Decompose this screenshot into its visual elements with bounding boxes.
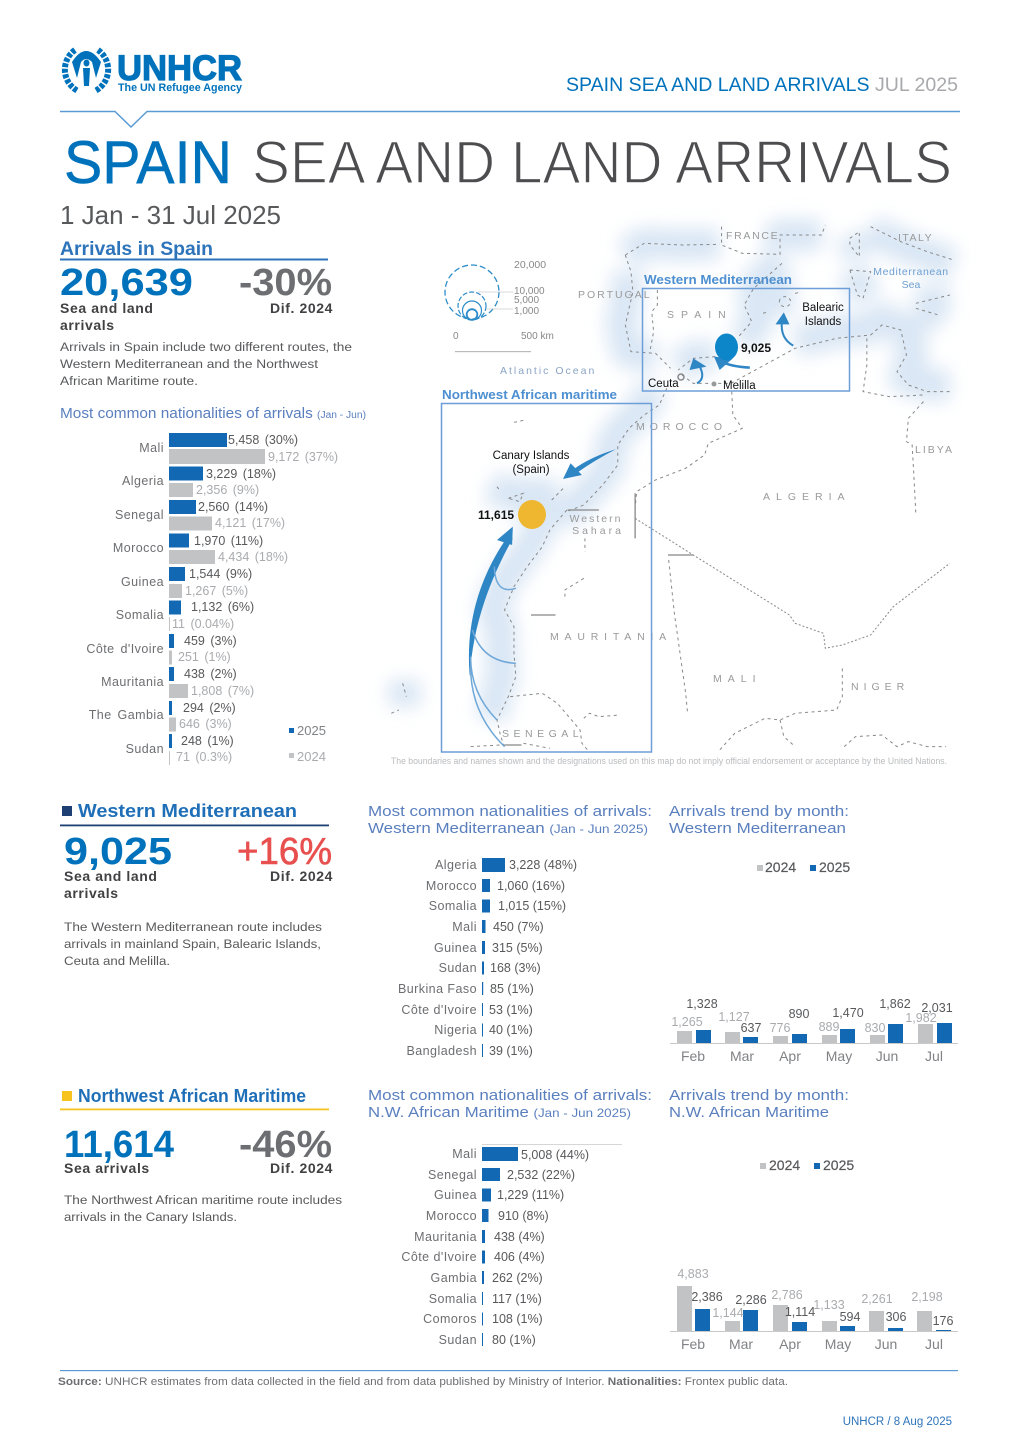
marker: Northwest African 11,615	[478, 500, 546, 529]
heading: nationalities Western Mediterranean	[368, 803, 652, 837]
legend: 2024	[297, 749, 326, 764]
country borders and coastlines	[391, 225, 954, 750]
heading: nationalities Western Mediterranean: Most common nationalities of arrivals:	[368, 803, 652, 820]
map country labels: SENEGAL	[502, 728, 583, 740]
route box: Northwest African maritime	[442, 388, 652, 752]
bar chart: nationalities 2025 vs 2024: 1,132 (6%)	[191, 600, 254, 614]
bar chart: nationalities 2025 vs 2024: 5,458 (30%)	[228, 433, 298, 447]
column chart: Western Mediterranean monthly: 830	[865, 1021, 885, 1035]
column chart: Western Mediterranean monthly: Mar	[730, 1048, 754, 1064]
bar chart: nationalities 2025 vs 2024: Senegal	[115, 508, 164, 522]
bar chart: nationalities 2025 vs 2024: Mauritania	[101, 675, 164, 689]
bar chart: Western Mediterranean nationalities: Guinea	[434, 941, 477, 955]
map country labels: SPAIN	[667, 309, 733, 321]
route box: Western Mediterranean	[642, 273, 850, 391]
column chart: Northwest African monthly: 1,144	[712, 1306, 744, 1320]
description	[60, 340, 352, 388]
map country labels	[500, 230, 954, 740]
logo: UNHCR: The UN Refugee Agency	[118, 82, 243, 94]
bar chart: nationalities 2025 vs 2024	[86, 433, 338, 765]
panel: Western Mediterranean: arrivals	[64, 885, 119, 901]
title: SEA AND LAND ARRIVALS	[252, 129, 952, 196]
map legend: circle sizes and scale: 1,000	[514, 306, 539, 317]
description: Western Mediterranean and the Northwest	[60, 357, 319, 371]
total arrivals: 11,614	[64, 1124, 174, 1166]
map country labels: Atlantic Ocean	[500, 365, 596, 377]
bar chart: Western Mediterranean nationalities: Nigeria	[434, 1023, 477, 1037]
heading: trend Western Mediterranean	[669, 803, 849, 837]
bar chart: Northwest African nationalities: Guinea	[434, 1188, 477, 1202]
column chart: Northwest African monthly: 2,198	[911, 1290, 943, 1304]
map legend: circle sizes and scale: 500 km	[521, 331, 554, 342]
map country labels: MALI	[713, 673, 762, 685]
place labels: Melilla	[723, 380, 756, 392]
map	[391, 225, 954, 766]
bar chart: Western Mediterranean nationalities: 1,060 (16%)	[497, 879, 565, 893]
panel: Northwest African Maritime: Sea arrivals	[64, 1160, 150, 1176]
map legend: circle sizes and scale: 0	[453, 331, 459, 342]
bar chart: Northwest African nationalities: Sudan	[439, 1333, 477, 1347]
description: arrivals in the Canary Islands.	[64, 1210, 237, 1224]
map country labels: LIBYA	[915, 444, 954, 456]
map legend: circle sizes and scale: 10,000	[514, 286, 545, 297]
footer	[58, 1370, 958, 1428]
column chart: Western Mediterranean monthly: 1,265	[671, 1015, 703, 1029]
bar chart: Northwest African nationalities	[401, 1144, 622, 1347]
bar chart: Western Mediterranean nationalities: 450 (7%)	[493, 920, 544, 934]
map legend: circle sizes and scale	[445, 259, 554, 352]
heading: Arrivals in Spain	[60, 239, 213, 260]
map country labels: Mediterranean	[873, 266, 949, 278]
description	[64, 1193, 342, 1224]
bar chart: nationalities 2025 vs 2024: Somalia	[116, 608, 164, 622]
column chart: Northwest African monthly	[670, 1157, 958, 1352]
description	[64, 920, 322, 968]
icon: UNHCR wreath and people	[65, 50, 108, 91]
bar chart: Western Mediterranean nationalities: 168 (3%)	[490, 961, 541, 975]
bar chart: Northwest African nationalities: 117 (1%)	[492, 1292, 542, 1306]
bar chart: Western Mediterranean nationalities: 85 (1%)	[490, 982, 534, 996]
bar chart: nationalities 2025 vs 2024: 1,808 (7%)	[191, 684, 254, 698]
logo: UNHCR: UNHCR	[117, 49, 242, 88]
panel: Western Mediterranean	[60, 800, 333, 968]
column chart: Western Mediterranean monthly: Feb	[681, 1048, 705, 1064]
bar chart: Western Mediterranean nationalities: Algeria	[435, 858, 477, 872]
place labels: Islands	[805, 316, 841, 328]
chart heading: nationalities: Most common nationalities of arrivals (Jan - Jun)	[60, 405, 366, 422]
sea glow along coasts	[405, 230, 954, 720]
panel: arrivals in Spain: arrivals	[60, 317, 115, 333]
bar chart: nationalities 2025 vs 2024: Algeria	[122, 474, 164, 488]
bar chart: nationalities 2025 vs 2024: 4,121 (17%)	[215, 516, 285, 530]
bar chart: Northwest African nationalities: Somalia	[429, 1292, 477, 1306]
legend	[757, 859, 850, 875]
route box: Northwest African maritime: Northwest African maritime	[442, 388, 617, 402]
column chart: Western Mediterranean monthly: 776	[770, 1021, 790, 1035]
heading: trend Western Mediterranean: Arrivals trend by month:	[669, 803, 849, 820]
total arrivals: 9,025	[64, 831, 172, 873]
column chart: Northwest African monthly: Mar	[729, 1336, 753, 1352]
map country labels: MAURITANIA	[550, 631, 672, 643]
column chart: Western Mediterranean monthly: 1,982	[905, 1011, 937, 1025]
map country labels: FRANCE	[726, 230, 779, 242]
bar chart: nationalities 2025 vs 2024: 294 (2%)	[183, 701, 236, 715]
bar chart: nationalities 2025 vs 2024: Morocco	[113, 541, 164, 555]
legend	[760, 1157, 854, 1173]
bar chart: Northwest African nationalities: Morocco	[426, 1209, 477, 1223]
bar chart: Western Mediterranean nationalities: Somalia	[429, 899, 477, 913]
marker: Western Mediterranean 9,025: 9,025	[741, 341, 771, 355]
bar chart: Northwest African nationalities: 262 (2%)	[492, 1271, 543, 1285]
panel: Western Mediterranean: Dif. 2024	[270, 868, 333, 884]
change vs 2024: -30%	[239, 262, 332, 304]
column chart: Northwest African monthly: 176	[933, 1314, 953, 1328]
bar chart: Northwest African nationalities: Côte d'Ivoire	[401, 1250, 477, 1264]
column chart: Northwest African monthly: May	[825, 1336, 851, 1352]
place labels: Canary Islands	[493, 450, 570, 462]
place labels: Balearic	[802, 302, 844, 314]
column chart: Northwest African monthly: 594	[840, 1310, 860, 1324]
bar chart: Western Mediterranean nationalities: Côte d'Ivoire	[401, 1003, 477, 1017]
column chart: Northwest African monthly: 4,883	[677, 1267, 709, 1281]
column chart: Western Mediterranean monthly: Jul	[925, 1048, 943, 1064]
bar chart: Western Mediterranean nationalities: 53 (1%)	[489, 1003, 533, 1017]
map country labels: MOROCCO	[636, 421, 727, 433]
panel: Western Mediterranean: Sea and land	[64, 868, 158, 884]
bar chart: nationalities 2025 vs 2024: 1,544 (9%)	[189, 567, 252, 581]
description: arrivals in mainland Spain, Balearic Islands,	[64, 937, 321, 951]
column chart: Northwest African monthly: 2,786	[771, 1288, 803, 1302]
panel: Northwest African Maritime: Dif. 2024	[270, 1160, 333, 1176]
header rule with chevron	[60, 112, 960, 127]
arrows: Northwest African routes	[469, 449, 616, 747]
column chart: Western Mediterranean monthly: May	[826, 1048, 852, 1064]
panel: arrivals in Spain: Sea and land	[60, 300, 154, 316]
place labels: (Spain)	[512, 464, 550, 476]
column chart: Northwest African monthly: 306	[886, 1310, 906, 1324]
marker: Western Mediterranean 9,025	[715, 334, 771, 360]
heading: nationalities Western Mediterranean: Western Mediterranean (Jan - Jun 2025)	[368, 820, 648, 837]
bar chart: Northwest African nationalities: Senegal	[428, 1168, 477, 1182]
arrows: Western Mediterranean routes	[689, 312, 793, 383]
bar chart: Northwest African nationalities: Gambia	[431, 1271, 477, 1285]
map country labels: Western	[570, 513, 622, 525]
column chart: Western Mediterranean monthly: Apr	[779, 1048, 801, 1064]
bar chart: nationalities 2025 vs 2024: 1,970 (11%)	[194, 534, 263, 548]
bar chart: Western Mediterranean nationalities: Burkina Faso	[398, 982, 477, 996]
description: African Maritime route.	[60, 374, 198, 388]
legend: 2024	[765, 859, 796, 875]
place labels: Ceuta	[648, 378, 679, 390]
bar chart: Western Mediterranean nationalities: 40 (1%)	[489, 1023, 533, 1037]
map country labels: NIGER	[851, 681, 909, 693]
source note: Source: UNHCR estimates from data collected in the field and from data published by Ministry of Interior. Nationalities: Frontex public data.	[58, 1376, 788, 1388]
bar chart: nationalities 2025 vs 2024: The Gambia	[89, 708, 164, 722]
logo: UNHCR	[65, 49, 243, 94]
bar chart: nationalities 2025 vs 2024: Guinea	[121, 575, 164, 589]
bar chart: Western Mediterranean nationalities: 315 (5%)	[492, 941, 543, 955]
column chart: Western Mediterranean monthly: 2,031	[921, 1001, 953, 1015]
panel: Northwest African Maritime	[60, 1086, 342, 1224]
bar chart: Northwest African nationalities: 2,532 (22%)	[507, 1168, 575, 1182]
column chart: Northwest African monthly: 1,133	[813, 1298, 845, 1312]
description: The Western Mediterranean route includes	[64, 920, 322, 934]
panel: arrivals in Spain	[60, 239, 352, 388]
map country labels: PORTUGAL	[578, 289, 652, 301]
bar chart: nationalities 2025 vs 2024: Sudan	[126, 742, 164, 756]
marker: Northwest African 11,615: 11,615	[478, 508, 514, 522]
bar chart: nationalities 2025 vs 2024: 3,229 (18%)	[206, 467, 276, 481]
map legend: circle sizes and scale: 20,000	[514, 259, 546, 271]
column chart: Northwest African monthly: 2,261	[861, 1292, 893, 1306]
bar chart: nationalities 2025 vs 2024: 459 (3%)	[184, 634, 237, 648]
publication date: UNHCR / 8 Aug 2025	[843, 1416, 952, 1428]
column chart: Northwest African monthly: Apr	[779, 1336, 801, 1352]
bar chart: nationalities 2025 vs 2024: 2,356 (9%)	[196, 483, 259, 497]
bar chart: Western Mediterranean nationalities: Morocco	[426, 879, 477, 893]
column chart: Northwest African monthly: Feb	[681, 1336, 705, 1352]
description: Ceuta and Melilla.	[64, 954, 170, 968]
bar chart: nationalities 2025 vs 2024: 438 (2%)	[184, 667, 237, 681]
column chart: Northwest African monthly: Jul	[925, 1336, 943, 1352]
place labels	[493, 302, 844, 476]
bar chart: Western Mediterranean nationalities: Bangladesh	[406, 1044, 477, 1058]
heading: trend Northwest African: N.W. African Maritime	[669, 1104, 829, 1121]
bar chart: Northwest African nationalities: Mauritania	[414, 1230, 477, 1244]
map country labels: Sahara	[572, 525, 624, 537]
bar chart: nationalities 2025 vs 2024: 248 (1%)	[181, 734, 234, 748]
change vs 2024: -46%	[239, 1124, 332, 1166]
date range: 1 Jan - 31 Jul 2025	[60, 200, 281, 230]
map legend: circle sizes and scale: 5,000	[514, 295, 539, 306]
bar chart: nationalities 2025 vs 2024: 1,267 (5%)	[185, 584, 248, 598]
column chart: Northwest African monthly: 2,286	[735, 1293, 767, 1307]
heading: trend Northwest African: Arrivals trend by month:	[669, 1087, 849, 1104]
bar chart: Northwest African nationalities: Comoros	[423, 1312, 477, 1326]
map disclaimer: The boundaries and names shown and the designations used on this map do not imply official endorsement or acceptance by the United Nations.	[391, 756, 947, 766]
bar chart: Northwest African nationalities: Mali	[452, 1147, 477, 1161]
bar chart: Western Mediterranean nationalities	[398, 858, 577, 1058]
bar chart: nationalities 2025 vs 2024: 251 (1%)	[178, 650, 231, 664]
map country labels: ITALY	[898, 232, 933, 244]
bar chart: nationalities 2025 vs 2024: Côte d'Ivoire	[86, 642, 164, 656]
bar chart: nationalities 2025 vs 2024: 71 (0.3%)	[176, 750, 232, 764]
description: Arrivals in Spain include two different routes, the	[60, 340, 352, 354]
bar chart: Western Mediterranean nationalities: Mali	[452, 920, 477, 934]
column chart: Northwest African monthly: 2,386	[691, 1290, 723, 1304]
column chart: Western Mediterranean monthly: 1,862	[879, 997, 911, 1011]
legend: 2025	[823, 1157, 854, 1173]
heading: Northwest African Maritime	[78, 1086, 306, 1106]
heading: nationalities Northwest African: Most common nationalities of arrivals:	[368, 1087, 652, 1104]
route box: Western Mediterranean: Western Mediterranean	[644, 273, 792, 287]
bar chart: nationalities 2025 vs 2024: 2,560 (14%)	[198, 500, 268, 514]
column chart: Western Mediterranean monthly: Jun	[876, 1048, 898, 1064]
legend	[289, 723, 326, 764]
column chart: Western Mediterranean monthly: 890	[789, 1007, 809, 1021]
column chart: Northwest African monthly: Jun	[875, 1336, 897, 1352]
heading: trend Northwest African	[669, 1087, 849, 1121]
column chart: Western Mediterranean monthly: 1,328	[686, 997, 718, 1011]
column chart: Western Mediterranean monthly: 637	[741, 1021, 761, 1035]
bar chart: nationalities 2025 vs 2024: 11 (0.04%)	[172, 617, 234, 631]
legend: 2024	[769, 1157, 800, 1173]
column chart: Western Mediterranean monthly: 889	[819, 1020, 839, 1034]
header report label: SPAIN SEA AND LAND ARRIVALS JUL 2025	[566, 75, 958, 96]
total arrivals: 20,639	[60, 262, 193, 304]
map country labels: ALGERIA	[763, 491, 851, 503]
column chart: Western Mediterranean monthly: 1,470	[832, 1006, 864, 1020]
heading	[60, 800, 329, 826]
legend: 2025	[297, 723, 326, 738]
bar chart: Western Mediterranean nationalities: 3,228 (48%)	[509, 858, 577, 872]
bar chart: Western Mediterranean nationalities: 39 (1%)	[489, 1044, 533, 1058]
bar chart: nationalities 2025 vs 2024: 4,434 (18%)	[218, 550, 288, 564]
bar chart: Western Mediterranean nationalities: Sudan	[439, 961, 477, 975]
column chart: Northwest African monthly: 1,114	[785, 1305, 815, 1319]
bar chart: nationalities 2025 vs 2024: 646 (3%)	[179, 717, 232, 731]
bar chart: Northwest African nationalities: 80 (1%)	[492, 1333, 536, 1347]
bar chart: Northwest African nationalities: 910 (8%)	[498, 1209, 549, 1223]
heading: nationalities Northwest African: N.W. African Maritime (Jan - Jun 2025)	[368, 1104, 631, 1121]
bar chart: nationalities 2025 vs 2024: Mali	[139, 441, 164, 455]
bar chart: Northwest African nationalities: 1,229 (11%)	[497, 1188, 564, 1202]
heading: trend Western Mediterranean: Western Mediterranean	[669, 820, 846, 837]
column chart: Western Mediterranean monthly: 1,127	[718, 1010, 750, 1024]
heading: Western Mediterranean	[78, 800, 297, 821]
bar chart: Northwest African nationalities: 5,008 (44%)	[521, 1148, 589, 1162]
heading: nationalities Northwest African	[368, 1087, 652, 1121]
map country labels: Sea	[902, 279, 920, 291]
bar chart: nationalities 2025 vs 2024: 9,172 (37%)	[268, 450, 338, 464]
bar chart: Western Mediterranean nationalities: 1,015 (15%)	[498, 899, 566, 913]
change vs 2024: +16%	[237, 831, 332, 873]
legend: 2025	[819, 859, 850, 875]
title: SPAIN	[64, 129, 232, 196]
description: The Northwest African maritime route includes	[64, 1193, 342, 1207]
column chart: Western Mediterranean monthly	[670, 859, 958, 1064]
bar chart: Northwest African nationalities: 108 (1%)	[492, 1312, 543, 1326]
bar chart: Northwest African nationalities: 406 (4%)	[494, 1250, 545, 1264]
bar chart: Northwest African nationalities: 438 (4%)	[494, 1230, 545, 1244]
panel: arrivals in Spain: Dif. 2024	[270, 300, 333, 316]
